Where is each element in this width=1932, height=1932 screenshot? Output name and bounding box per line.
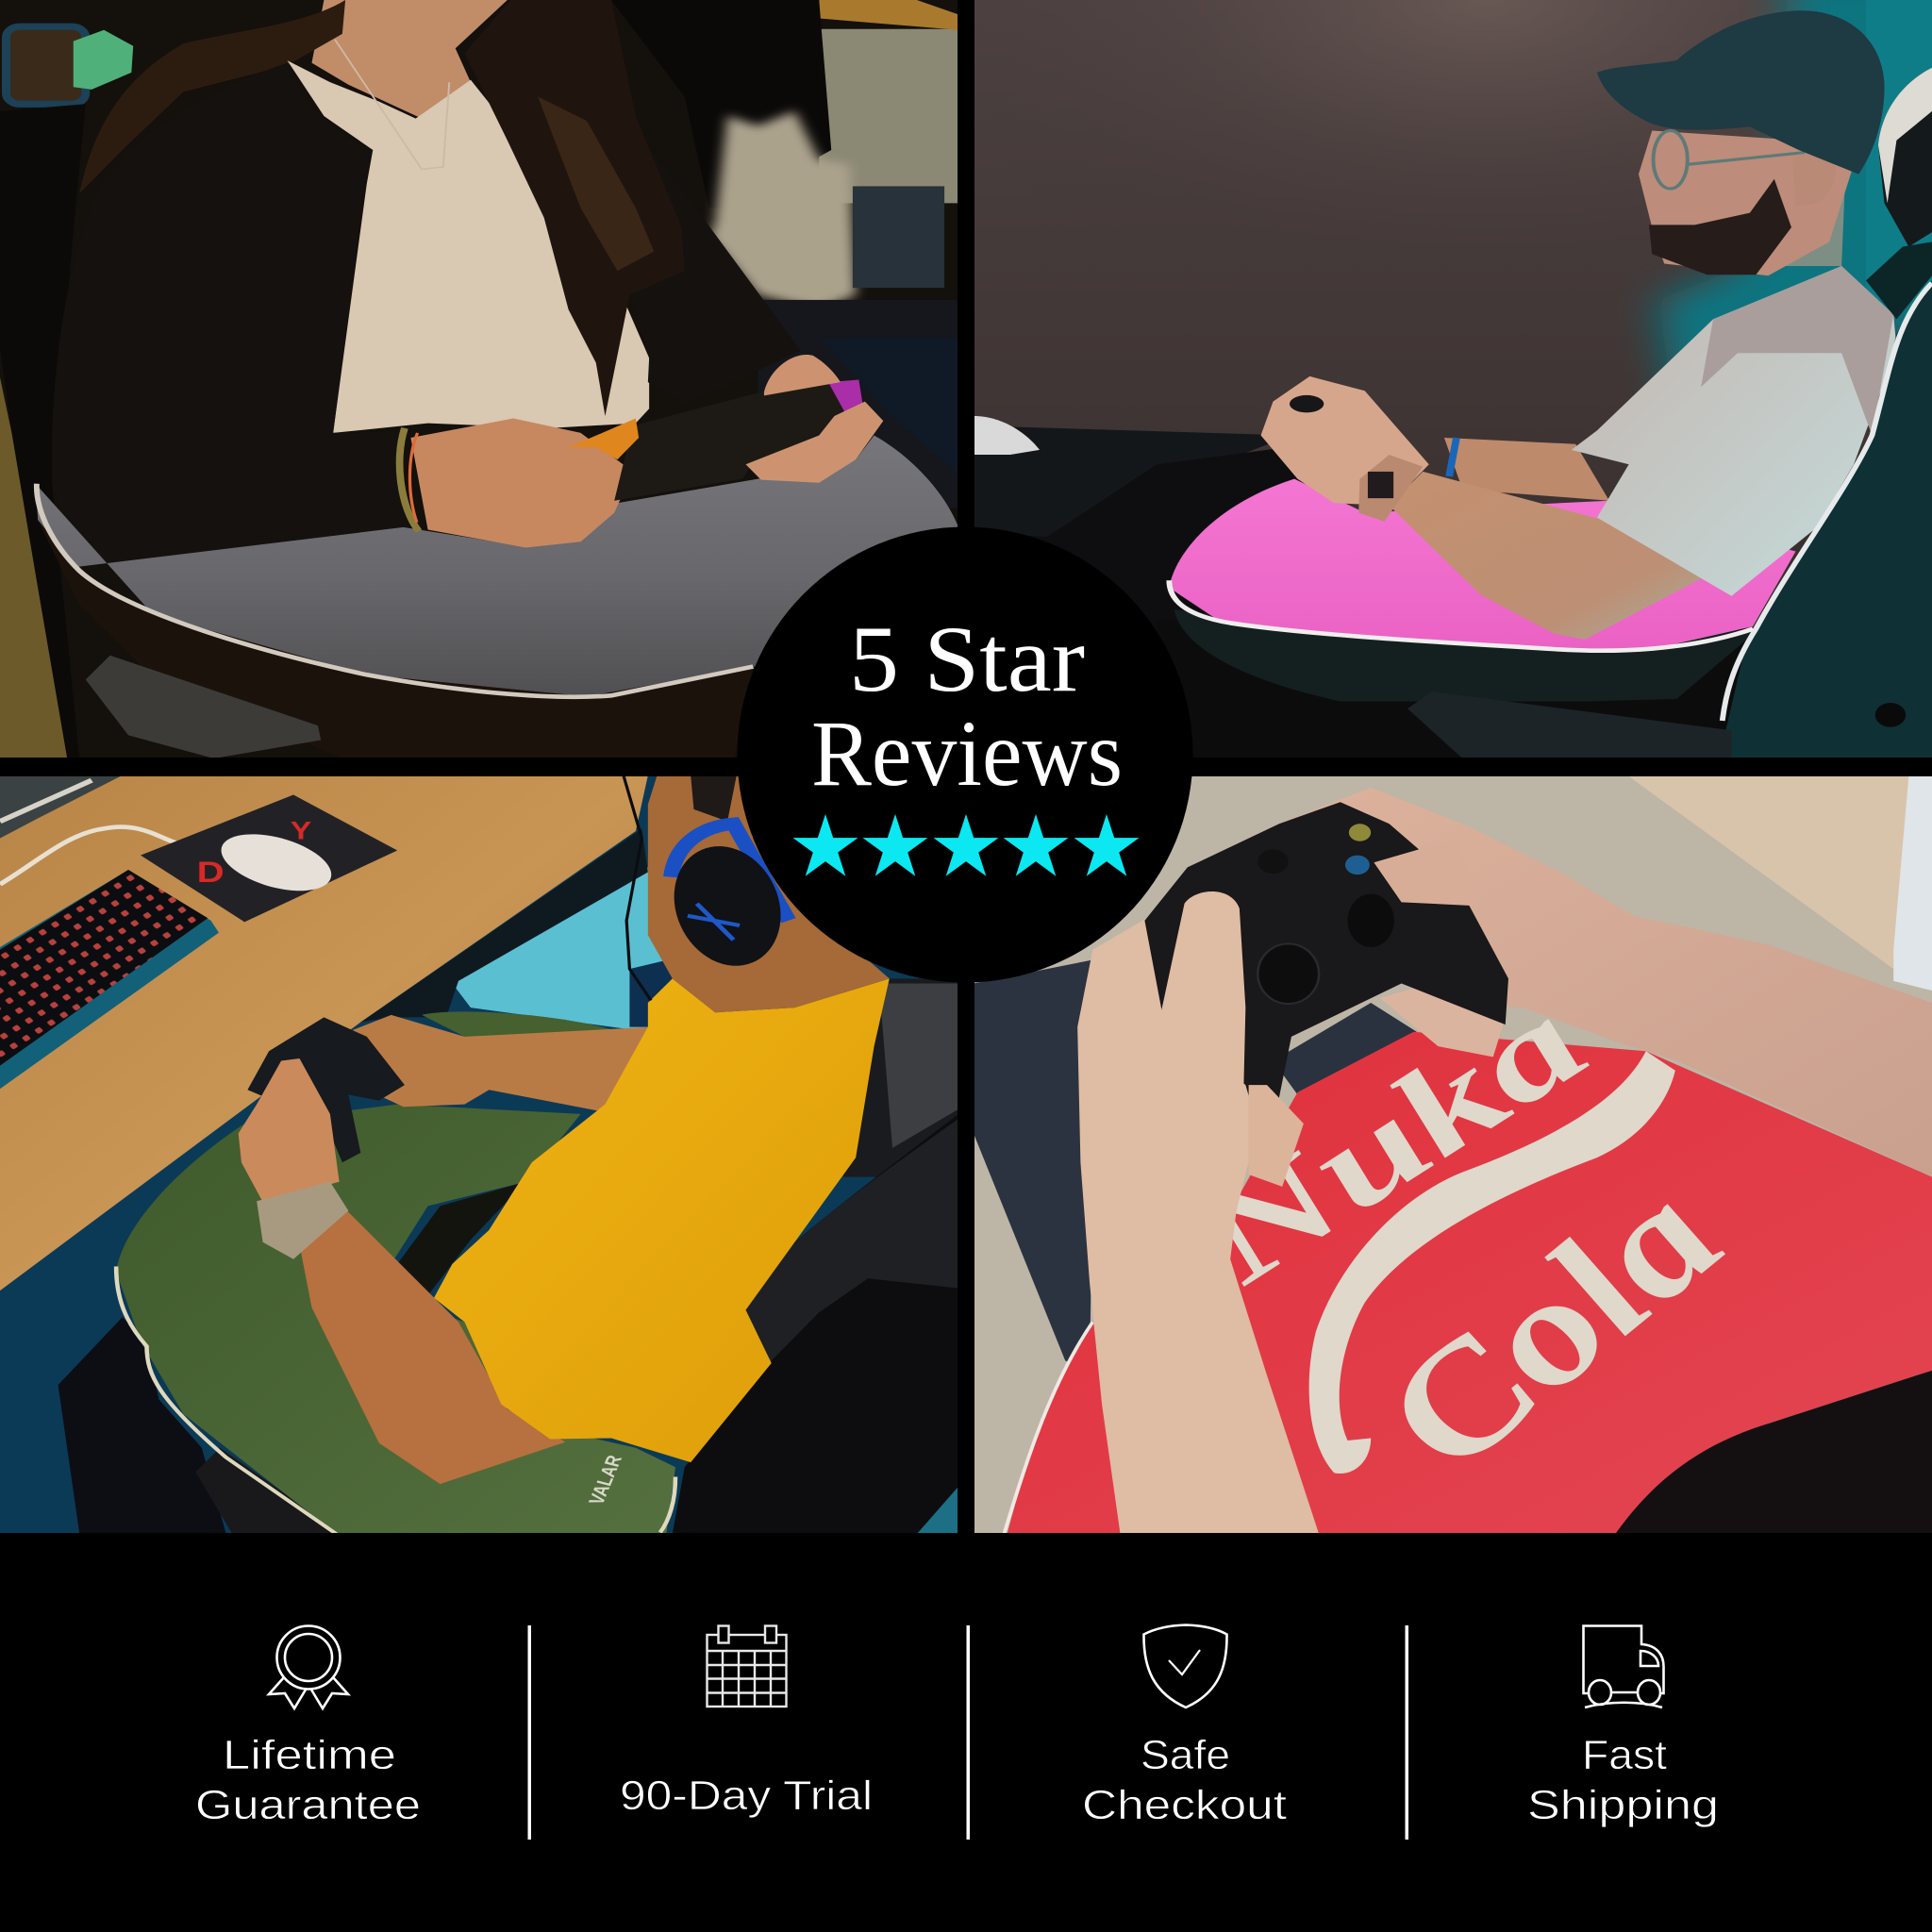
floor [0, 775, 958, 1534]
grey cushion [36, 435, 958, 696]
forearm [1390, 472, 1707, 640]
benefit: Safe Checkout [1082, 1624, 1287, 1828]
glasses [1654, 130, 1805, 189]
grey t-shirt [1572, 266, 1896, 596]
necklace [335, 40, 449, 169]
baseball cap [1597, 10, 1885, 175]
lower arm [300, 1206, 565, 1484]
game controller [247, 1017, 405, 1162]
top-left desk items [0, 775, 123, 839]
room background [0, 0, 958, 758]
handheld console [569, 380, 863, 501]
icon: calendar [708, 1626, 787, 1707]
face and neck [311, 0, 508, 119]
floor tiles [1627, 775, 1912, 969]
gaming chair [1720, 68, 1932, 758]
label [1527, 1732, 1719, 1828]
cushion underside [38, 520, 755, 758]
right thumb [1374, 839, 1481, 906]
label: 90-Day Trial [620, 1773, 873, 1819]
center badge: 5 Star Reviews [738, 526, 1192, 983]
neck and head [648, 775, 890, 1012]
chair headrest and mirror [6, 26, 133, 104]
back arm [1444, 438, 1609, 501]
photo: hands holding controller over red Nuka Cola cushion [974, 776, 1932, 1533]
badge heading [811, 607, 1123, 806]
green cushion [116, 1105, 675, 1534]
left hand behind controller [1077, 916, 1319, 1534]
light blue cabinet [452, 867, 691, 1032]
red cushion [1008, 1032, 1932, 1534]
badge heading: 5 Star [849, 607, 1085, 711]
lower fingers [1249, 1085, 1304, 1187]
dark gap under arms [397, 1182, 525, 1295]
benefit: Fast Shipping [1527, 1626, 1719, 1828]
game controller [1144, 802, 1508, 1158]
armrest [1407, 691, 1731, 758]
divider [966, 1625, 970, 1840]
cushion piping [116, 1266, 675, 1534]
cushion underside [1174, 609, 1759, 701]
divider [528, 1625, 531, 1840]
chair armrest [86, 656, 321, 758]
photo: woman with grey cushion and handheld console [0, 0, 958, 758]
sofa background [974, 775, 1932, 1534]
desk and mouse [974, 416, 1304, 758]
floor under cushion [1157, 619, 1768, 758]
photo: man in cap with pink cushion [974, 0, 1932, 758]
label: Guarantee [195, 1782, 421, 1828]
white cable [0, 827, 226, 884]
headset [624, 775, 794, 1000]
white cloth [1893, 775, 1932, 991]
keyboard [0, 870, 219, 1089]
bottom benefits band [0, 1533, 1932, 1932]
back hair [79, 0, 345, 193]
wristwatch [257, 1182, 348, 1259]
Cola lettering: Cola [1339, 1158, 1761, 1496]
long hair [464, 0, 685, 416]
chair body [0, 104, 86, 758]
mouse pad: D [197, 855, 225, 889]
white t-shirt [288, 60, 649, 433]
icon: delivery truck [1583, 1626, 1664, 1707]
label: Lifetime [223, 1732, 396, 1778]
gutters between photos [0, 0, 1932, 1534]
label [1082, 1732, 1287, 1828]
divider [1406, 1625, 1408, 1840]
label [195, 1732, 421, 1828]
right hand and forearm [1279, 788, 1932, 1177]
photo: man in yellow shirt with green cushion at desk [0, 776, 958, 1533]
dark wall [974, 0, 1932, 758]
cushion piping [1169, 580, 1753, 651]
five star rating [792, 814, 1140, 876]
dark trousers [974, 959, 1417, 1371]
dark leg [1615, 1371, 1932, 1534]
script swoosh [1309, 1051, 1675, 1474]
front hand [239, 1058, 340, 1202]
Nuka lettering: Nuka [1158, 977, 1618, 1307]
chair back and seat [195, 978, 958, 1534]
yellow polo shirt [434, 978, 890, 1462]
cushion piping [37, 484, 753, 697]
label: Safe [1141, 1732, 1230, 1778]
black cardigan [52, 63, 407, 567]
icon: award ribbon [269, 1626, 348, 1708]
mouse pad: Y [291, 817, 311, 845]
hand holding controller [1261, 376, 1429, 506]
computer mouse [211, 823, 341, 902]
jeans [58, 1317, 226, 1534]
benefit: Lifetime Guarantee [195, 1626, 421, 1828]
icon: shield with check [1143, 1624, 1227, 1707]
badge heading: Reviews [811, 701, 1123, 806]
wooden desk [0, 775, 648, 1291]
label: Shipping [1527, 1782, 1719, 1828]
cushion logo: VALAR [585, 1453, 627, 1507]
left thumb [1160, 891, 1245, 1085]
pink cushion [1169, 479, 1796, 651]
left hand and bracelet [400, 419, 633, 547]
mouse pad [141, 795, 397, 922]
head [1639, 130, 1854, 275]
label: Checkout [1082, 1782, 1287, 1828]
upper arm and hand [348, 1015, 651, 1111]
right hand [746, 355, 883, 483]
fingers under controller [1380, 989, 1506, 1057]
wristwatch and bracelet [1358, 438, 1457, 522]
label: Fast [1582, 1732, 1667, 1778]
benefit: 90-Day Trial [620, 1626, 873, 1819]
